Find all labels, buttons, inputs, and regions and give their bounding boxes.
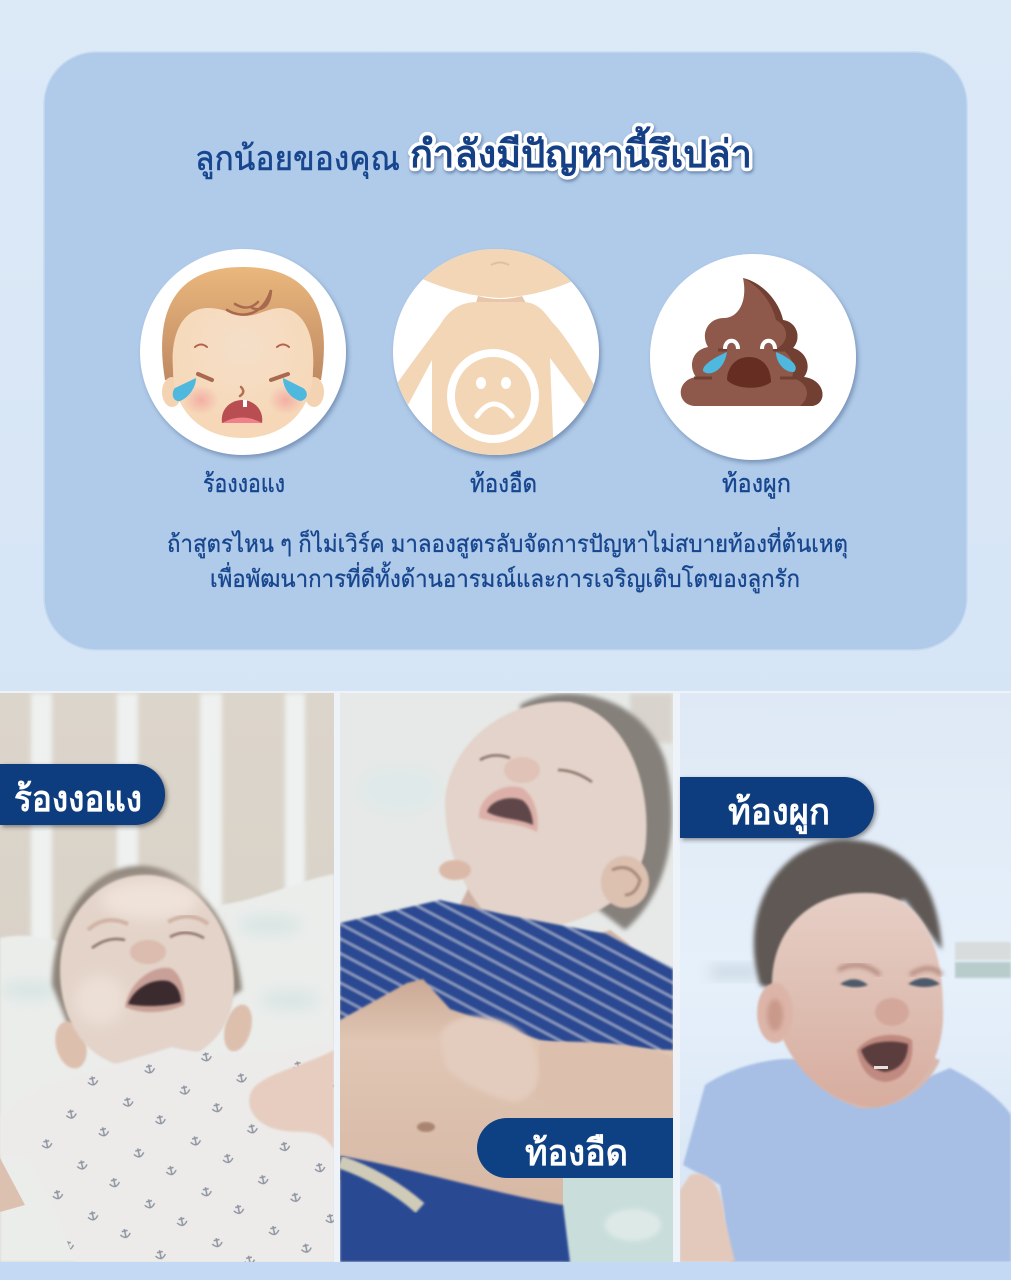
body copy: เพื่อพัฒนาการที่ดีทั้งด้านอารมณ์และการเจริญเติบโตของลูกรัก <box>210 561 800 594</box>
tag: crying: ร้องงอแง <box>14 778 142 819</box>
bottom band <box>0 1262 1011 1280</box>
photo strip base <box>0 691 1011 1262</box>
label: crying: ร้องงอแง <box>203 470 285 498</box>
label: bloated: ท้องอืด <box>470 470 537 498</box>
icon: crying baby face <box>140 249 346 455</box>
tag: bloated: ท้องอืด <box>525 1132 628 1173</box>
icon: bloated belly <box>393 240 599 460</box>
panel: question card <box>44 52 967 650</box>
body copy <box>167 527 848 594</box>
tag: constipated: ท้องผูก <box>728 791 830 835</box>
tag: bloated <box>477 1118 673 1178</box>
photo: crying baby in blue shirt <box>680 693 1011 1262</box>
heading: กำลังมีปัญหานี้รึเปล่า <box>410 126 752 176</box>
icon: crying poop <box>650 254 856 460</box>
heading: ลูกน้อยของคุณ <box>195 140 400 179</box>
tag: constipated <box>680 777 874 838</box>
label: constipated: ท้องผูก <box>722 470 791 499</box>
heading <box>195 126 752 179</box>
tag: crying <box>0 764 165 825</box>
body copy: ถ้าสูตรไหน ๆ ก็ไม่เวิร์ค มาลองสูตรลับจัดการปัญหาไม่สบายท้องที่ต้นเหตุ <box>167 527 848 559</box>
photo: crying baby in crib <box>0 693 334 1262</box>
photo: baby with bloated belly <box>340 693 673 1262</box>
